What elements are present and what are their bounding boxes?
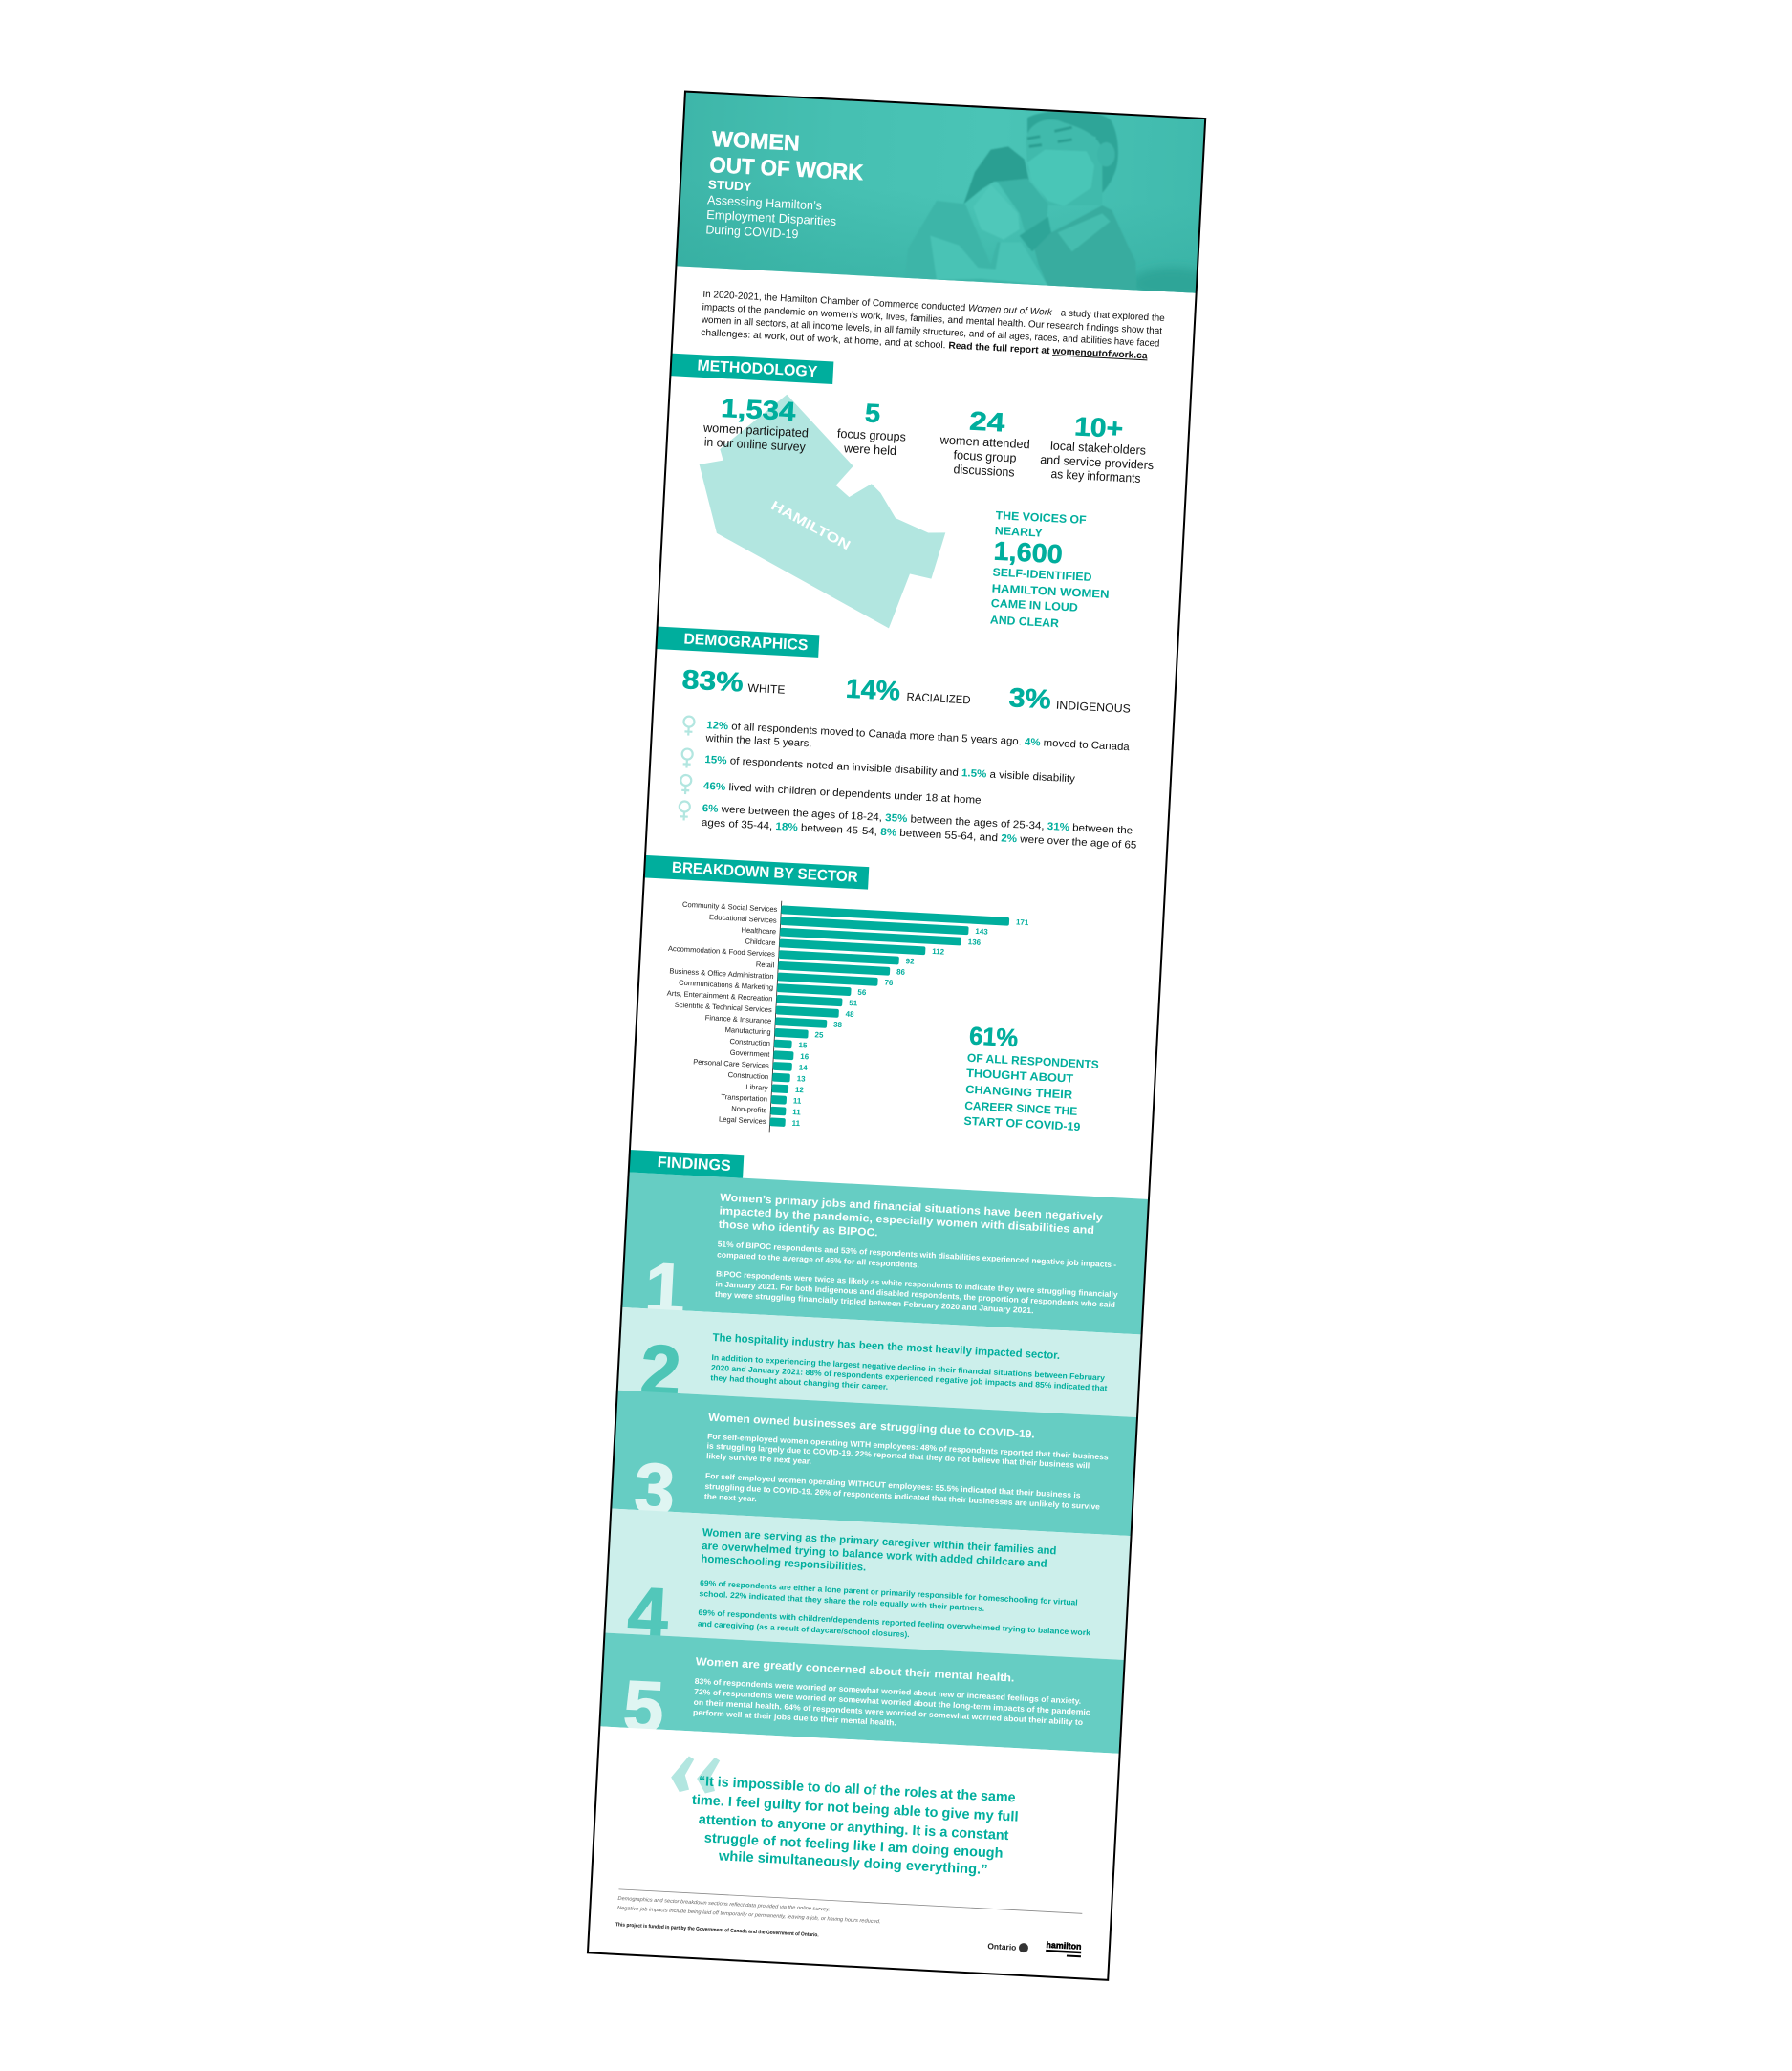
sector labels: Government [729, 1048, 771, 1059]
stat: focus group attendees: focus group [953, 447, 1017, 465]
quote: time. I feel guilty for not being able to give my full [692, 1793, 1019, 1825]
sector labels: Healthcare [741, 925, 776, 936]
title: OUT OF WORK [709, 152, 864, 184]
bar values: 76 [884, 978, 894, 987]
stat: indigenous: 3% [1008, 682, 1052, 714]
callout: voices of nearly 1,600: CAME IN LOUD [991, 596, 1078, 615]
panel: finding 4 [603, 1509, 1132, 1679]
bar values: 11 [793, 1096, 802, 1106]
bar values: 15 [798, 1041, 808, 1050]
intro text block [700, 290, 1165, 362]
sector labels: Library [745, 1083, 768, 1092]
title: WOMEN [711, 126, 800, 156]
sector labels: Non-profits [731, 1104, 767, 1114]
callout: voices of nearly 1,600: THE VOICES OF [995, 508, 1087, 527]
finding 1 text: compared to the average of 46% for all respondents. [717, 1249, 919, 1269]
footnotes [615, 1889, 1082, 1952]
finding 4 text: school. 22% indicated that they share the role equally with their partners. [699, 1588, 984, 1613]
number 4: 4 [626, 1572, 670, 1655]
fact: immigration: 12% of all respondents moved to Canada more than 5 years ago. 4% moved to Canada [706, 720, 1131, 753]
finding 3 text: For self-employed women operating WITHOUT employees: 55.5% indicated that their business is [705, 1471, 1081, 1499]
stat: focus groups: 5 [864, 398, 881, 428]
sector labels: Community & Social Services [682, 900, 778, 914]
stat: focus group attendees: discussions [953, 462, 1015, 480]
callout: voices of nearly 1,600: HAMILTON WOMEN [991, 582, 1110, 601]
quote: while simultaneously doing everything.” [717, 1848, 988, 1878]
finding 3 text: Women owned businesses are struggling due to COVID-19. [708, 1413, 1035, 1441]
finding 1 text: in January 2021. For both Indigenous and disabled respondents, the proportion of respondents who said [715, 1279, 1115, 1309]
subtitle: During COVID-19 [705, 222, 799, 241]
finding 5 text: Women are greatly concerned about their mental health. [696, 1656, 1015, 1685]
finding 4 text: 69% of respondents with children/dependents reported feeling overwhelmed trying to balance work [698, 1607, 1091, 1637]
quote: attention to anyone or anything. It is a constant [698, 1812, 1009, 1844]
finding 2 text: The hospitality industry has been the most heavily impacted sector. [712, 1332, 1060, 1362]
icon: female symbol 4 [679, 801, 690, 821]
sector labels: Transportation [721, 1092, 767, 1104]
heading: breakdown by sector [643, 855, 869, 890]
bar values: 16 [800, 1052, 810, 1061]
sector labels: Retail [756, 960, 775, 969]
poster content [587, 91, 1206, 1980]
stat: survey participants: in our online survey [703, 435, 807, 454]
finding 2 text: they had thought about changing their career. [710, 1372, 888, 1391]
heading: findings: FINDINGS [657, 1154, 731, 1175]
callout: 61 percent: CAREER SINCE THE [964, 1099, 1078, 1118]
sector labels [659, 899, 778, 1126]
stat: key informants: as key informants [1050, 466, 1141, 485]
panel: finding 2 [615, 1307, 1142, 1437]
banner photo [676, 91, 1214, 299]
sector labels: Educational Services [709, 913, 777, 925]
finding 3 text [704, 1413, 1110, 1521]
heading: methodology [670, 354, 833, 384]
callout: 61 percent: 61% [968, 1021, 1019, 1052]
footnotes: Demographics and sector breakdown sections reflect data provided via the online survey. [617, 1896, 830, 1912]
fact: disability: 15% of respondents noted an invisible disability and 1.5% a visible disability [704, 754, 1076, 785]
logo: Hamilton Chamber [1046, 1940, 1082, 1957]
number 1: 1 [643, 1248, 687, 1331]
stat: survey participants [702, 392, 810, 454]
finding 4 text: are overwhelmed trying to balance work with added childcare and [702, 1541, 1047, 1570]
stat: focus groups: were held [843, 441, 896, 458]
finding 2 text: In addition to experiencing the largest negative decline in their financial situations between February [711, 1352, 1106, 1383]
callout: voices of nearly 1,600 [990, 508, 1113, 633]
bars [769, 905, 1009, 1138]
callout: 61 percent: THOUGHT ABOUT [966, 1067, 1074, 1086]
finding 1 text: those who identify as BIPOC. [718, 1219, 878, 1239]
bar values: 143 [975, 927, 989, 937]
bar values: 86 [896, 967, 906, 977]
footnotes: Negative job impacts include being laid off temporarily or permanently, leaving a job, or having hours reduced. [617, 1906, 881, 1925]
stat: focus group attendees [938, 404, 1032, 480]
finding 4 text [698, 1527, 1095, 1649]
finding 3 text: For self-employed women operating WITH employees: 48% of respondents reported that their business [707, 1432, 1109, 1462]
finding 4 text: Women are serving as the primary caregiver within their families and [702, 1527, 1057, 1557]
quote: “It is impossible to do all of the roles at the same [699, 1774, 1016, 1805]
stat: focus groups [836, 397, 908, 459]
quote: struggle of not feeling like I am doing enough [703, 1831, 1004, 1862]
heading: demographics: DEMOGRAPHICS [683, 632, 809, 654]
title: STUDY [708, 177, 753, 194]
stat: white [681, 664, 787, 700]
stat: focus groups: focus groups [837, 426, 907, 444]
bar values: 56 [857, 988, 867, 997]
icon: female symbol 1 [683, 716, 695, 736]
intro text block: In 2020-2021, the Hamilton Chamber of Commerce conducted Women out of Work - a study that explored the [702, 290, 1165, 324]
stat: key informants: and service providers [1040, 452, 1155, 472]
callout: 61 percent: OF ALL RESPONDENTS [967, 1051, 1099, 1071]
mask below number 5 [598, 1726, 1120, 1763]
fact: ages: ages of 35-44, 18% between 45-54, 8% between 55-64, and 2% were over the age of 65 [702, 817, 1137, 852]
bar values: 13 [796, 1074, 806, 1084]
fact: dependents: 46% lived with children or dependents under 18 at home [703, 781, 982, 807]
intro text block: women in all sectors, at all income levels, in all family structures, and of all ages, races, and abilities have faced [701, 314, 1160, 350]
finding 4 text: and caregiving (as a result of daycare/school closures). [698, 1619, 910, 1639]
bar values: 11 [791, 1119, 801, 1128]
stat: indigenous [1008, 682, 1132, 719]
finding 5 text: 72% of respondents were worried or somewhat worried about the long-term impacts of the pandemic [694, 1687, 1090, 1716]
sector labels: Manufacturing [724, 1025, 771, 1037]
callout: 61 percent: CHANGING THEIR [965, 1083, 1073, 1102]
sheet background [587, 91, 1206, 1980]
finding 1 text: BIPOC respondents were twice as likely as white respondents to indicate they were struggling financially [716, 1268, 1118, 1299]
sector labels: Business & Office Administration [669, 966, 774, 981]
subtitle: Employment Disparities [706, 207, 837, 228]
bar values: 171 [1016, 917, 1029, 927]
stat: survey participants: 1,534 [721, 393, 797, 426]
heading: demographics [656, 627, 819, 658]
panel: finding 1 [620, 1172, 1149, 1355]
callout: voices of nearly 1,600: 1,600 [993, 536, 1063, 569]
bar values: 38 [833, 1021, 843, 1029]
bar values: 51 [849, 999, 858, 1007]
finding 4 text: 69% of respondents are either a lone parent or primarily responsible for homeschooling for virtual [700, 1578, 1078, 1607]
map of Hamilton [691, 390, 952, 631]
bar values: 25 [814, 1030, 824, 1040]
icon: female symbol 3 [680, 775, 692, 794]
finding 5 text [693, 1656, 1092, 1737]
subtitle: Assessing Hamilton’s [707, 192, 823, 213]
heading: methodology: METHODOLOGY [697, 358, 818, 380]
bar values: 112 [932, 947, 945, 957]
bar values: 48 [845, 1009, 854, 1019]
finding 1 text: 51% of BIPOC respondents and 53% of respondents with disabilities experienced negative job impacts - [717, 1239, 1117, 1269]
finding 2 text [710, 1332, 1110, 1403]
finding 5 text: on their mental health. 64% of respondents were worried or somewhat worried about their ability to [693, 1697, 1083, 1727]
logo: Hamilton Chamber: hamilton [1046, 1940, 1082, 1952]
number 2: 2 [638, 1329, 683, 1413]
finding 1 text: Women’s primary jobs and financial situations have been negatively [720, 1192, 1104, 1223]
finding 3 text: the next year. [704, 1491, 757, 1503]
finding 1 text: impacted by the pandemic, especially women with disabilities and [719, 1205, 1094, 1237]
callout: voices of nearly 1,600: SELF-IDENTIFIED [992, 566, 1092, 584]
finding 1 text [715, 1192, 1122, 1320]
number 5: 5 [621, 1666, 666, 1749]
bar chart: respondents by sector [659, 895, 1029, 1145]
finding 4 text: homeschooling responsibilities. [701, 1554, 867, 1574]
bar values [791, 907, 1029, 1139]
stat: focus group attendees: 24 [969, 406, 1006, 437]
sheet outline [588, 92, 1205, 1980]
finding 2 text: 2020 and January 2021: 88% of respondents experienced negative job impacts and 85% indicated that [711, 1363, 1108, 1392]
icon: female symbol 2 [681, 748, 693, 768]
sector labels: Communications & Marketing [679, 979, 773, 992]
finding 5 text: 83% of respondents were worried or somewhat worried about new or increased feelings of anxiety. [695, 1676, 1081, 1706]
stat: white: WHITE [747, 681, 786, 697]
sector labels: Construction [727, 1070, 768, 1081]
sector labels: Scientific & Technical Services [675, 1001, 772, 1014]
stat: focus group attendees: women attended [939, 432, 1030, 451]
stat: racialized [845, 674, 972, 709]
number 3: 3 [633, 1448, 677, 1531]
finding 5 text: perform well at their jobs due to their mental health. [693, 1707, 896, 1728]
heading: breakdown by sector: BREAKDOWN BY SECTOR [672, 860, 859, 886]
callout: 61 percent: START OF COVID-19 [963, 1114, 1081, 1133]
stat: white: 83% [681, 664, 745, 698]
map of Hamilton: HAMILTON [768, 497, 853, 552]
intro text block: impacts of the pandemic on women’s work, lives, families, and mental health. Our research findings show that [702, 302, 1162, 336]
bar values: 92 [905, 957, 915, 966]
stat: survey participants: women participated [702, 421, 809, 440]
finding 1 text: they were struggling financially tripled between February 2020 and January 2021. [715, 1289, 1034, 1315]
fact: ages: 6% were between the ages of 18-24, 35% between the ages of 25-34, 31% between the [702, 803, 1133, 837]
stat: racialized: RACIALIZED [906, 690, 971, 707]
bar values: 11 [792, 1108, 801, 1116]
callout: voices of nearly 1,600: AND CLEAR [990, 613, 1060, 630]
bar values: 136 [968, 938, 982, 947]
stat: key informants: 10+ [1073, 411, 1124, 443]
sector labels: Childcare [745, 937, 776, 947]
panel: finding 5 [598, 1632, 1125, 1773]
sector labels: Accommodation & Food Services [668, 944, 775, 959]
panel: finding 3 [610, 1391, 1138, 1555]
stat: racialized: 14% [845, 674, 901, 706]
finding 3 text: likely survive the next year. [706, 1451, 811, 1466]
subtitle [705, 192, 838, 243]
bar values: 14 [798, 1064, 808, 1072]
heading: findings [628, 1150, 744, 1178]
sector labels: Arts, Entertainment & Recreation [667, 989, 773, 1003]
bar values: 12 [795, 1086, 805, 1094]
logo: Ontario: Ontario [987, 1941, 1017, 1952]
finding 3 text: struggling due to COVID-19. 26% of respondents indicated that their businesses are unlikely to survive [704, 1481, 1101, 1512]
quote [689, 1774, 1020, 1880]
sector labels: Finance & Insurance [705, 1013, 771, 1025]
callout: voices of nearly 1,600: NEARLY [995, 524, 1043, 540]
finding 3 text: is struggling largely due to COVID-19. 22% reported that they do not believe that their business will [706, 1441, 1090, 1470]
fact: ages [702, 803, 1137, 852]
stat: key informants [1039, 410, 1156, 486]
sector labels: Construction [729, 1037, 770, 1047]
sector labels: Legal Services [719, 1114, 766, 1126]
icon: quotation mark [670, 1756, 720, 1794]
footnotes: This project is funded in part by the Government of Canada and the Government of Ontario. [615, 1922, 819, 1938]
logo: Ontario [987, 1941, 1028, 1952]
intro text block: challenges: at work, out of work, at home, and at school. Read the full report at womenoutofwork.ca [701, 328, 1148, 361]
title [708, 126, 866, 200]
stat: indigenous: INDIGENOUS [1056, 699, 1131, 716]
callout: 61 percent [963, 1021, 1101, 1134]
stat: key informants: local stakeholders [1050, 439, 1147, 458]
fact: immigration: within the last 5 years. [704, 733, 812, 749]
sector labels: Personal Care Services [693, 1057, 769, 1070]
